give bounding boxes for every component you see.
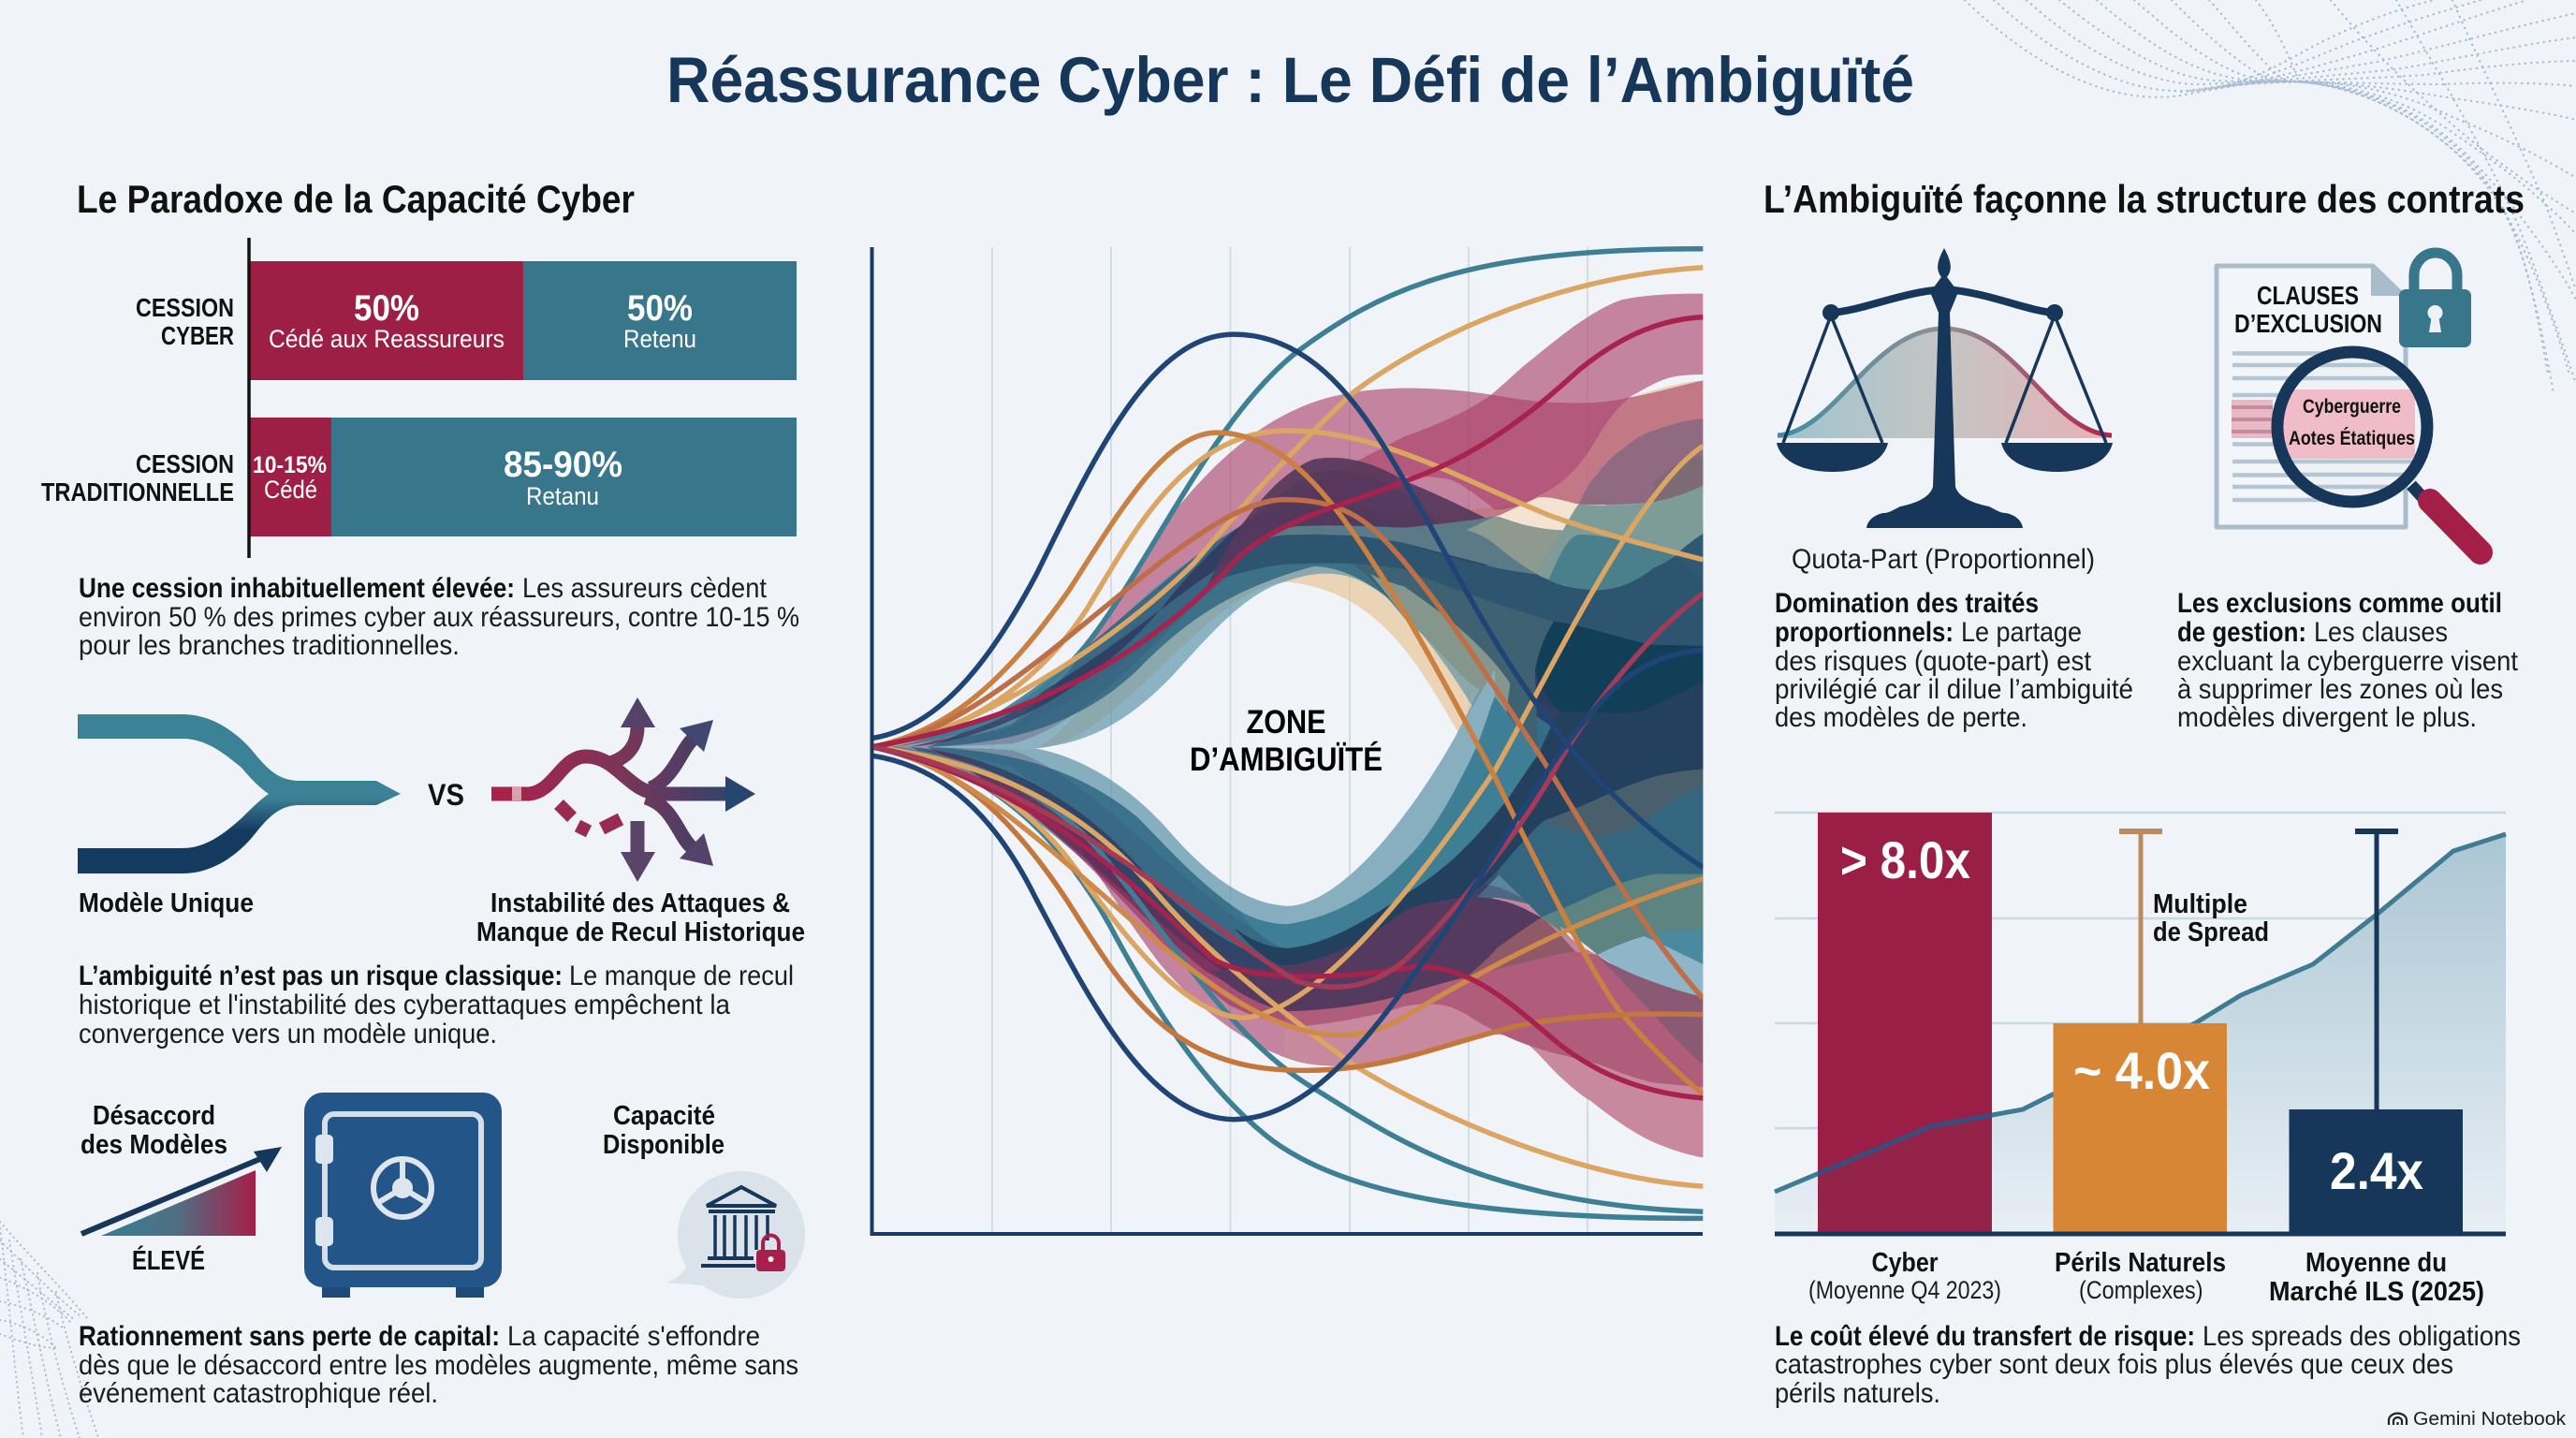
label: zone d'ambiguïté: D’AMBIGUÏTÉ — [1190, 741, 1383, 778]
title: Réassurance Cyber : Le Défi de l’Ambiguïté — [666, 44, 1914, 116]
label: zone d'ambiguïté — [1190, 704, 1383, 778]
axis labels: Périls Naturels — [2055, 1248, 2226, 1278]
text block: cession élevée: pour les branches traditionnelles. — [79, 630, 460, 661]
axis labels — [1808, 1248, 2484, 1307]
stacked bar chart: cession: 50% — [354, 288, 419, 329]
footer: gemini notebook mark: Gemini Notebook — [2413, 1409, 2567, 1430]
stacked bar chart: cession: Cédé aux Reassureurs — [269, 325, 505, 353]
label: instabilité des attaques — [476, 888, 805, 947]
stacked bar chart: cession: 85-90% — [504, 445, 622, 485]
icon: safe — [304, 1093, 502, 1298]
text block: ambiguïté — [79, 961, 794, 1049]
axis labels: Cyber — [1872, 1248, 1938, 1278]
text block: rationnement: événement catastrophique réel. — [79, 1378, 438, 1409]
label: multiple de spread — [2153, 889, 2269, 947]
text block: ambiguïté: L’ambiguité n’est pas un risque classique: — [79, 961, 563, 991]
text block: cession élevée — [79, 573, 799, 661]
text block: cession élevée: environ 50 % des primes cyber aux réassureurs, contre 10-15 % — [79, 602, 799, 633]
label: désaccord des modèles — [80, 1101, 227, 1160]
stacked bar chart: cession: Cédé — [264, 476, 317, 504]
axis labels: (Moyenne Q4 2023) — [1808, 1276, 2001, 1304]
label: capacité disponible: Capacité — [613, 1101, 715, 1131]
text block: exclusions — [2177, 588, 2519, 733]
stacked bar chart: cession: CESSION — [136, 293, 234, 322]
bar: cyber: > 8.0x — [1840, 830, 1970, 889]
icon: rising ramp arrow — [81, 1147, 282, 1236]
label: capacité disponible: Disponible — [603, 1130, 724, 1160]
icon: balance scale with bell curve — [1777, 248, 2113, 528]
text block: exclusions: excluant la cyberguerre visent — [2177, 646, 2519, 677]
icon: exclusion clauses document with magnifier and lock — [2217, 253, 2481, 552]
label: instabilité des attaques: Manque de Recul Historique — [476, 917, 805, 947]
panel: structure des contrats — [1764, 177, 2525, 1409]
bar: moyenne ILS: 2.4x — [2330, 1141, 2423, 1200]
stacked bar chart: cession: CESSION — [136, 449, 234, 478]
text block: rationnement: La capacité s'effondre — [507, 1321, 760, 1352]
text block: traités proportionnels — [1775, 588, 2133, 733]
label: instabilité des attaques: Instabilité des Attaques & — [490, 888, 790, 918]
bar: périls naturels — [2054, 831, 2227, 1232]
text block: ambiguïté: historique et l'instabilité des cyberattaques empêchent la — [79, 990, 730, 1020]
icon: exclusion clauses document with magnifier and lock: D’EXCLUSION — [2234, 309, 2382, 338]
text block: rationnement: dès que le désaccord entre les modèles augmente, même sans — [79, 1350, 798, 1381]
text block: traités proportionnels: Domination des traités — [1775, 588, 2039, 619]
label: élevé: ÉLEVÉ — [132, 1244, 205, 1276]
text block: traités proportionnels: Le partage — [1961, 617, 2082, 648]
stacked bar chart: cession: 50% — [627, 288, 693, 329]
heading: paradoxe: Le Paradoxe de la Capacité Cyber — [77, 177, 635, 221]
text block: traités proportionnels: des modèles de perte. — [1775, 702, 2027, 733]
label: capacité disponible — [603, 1101, 724, 1160]
text block: cession élevée: Une cession inhabituellement élevée: — [79, 573, 515, 604]
label: multiple de spread: de Spread — [2153, 917, 2269, 947]
text block: coût du transfert: Les spreads des obligations — [2203, 1321, 2521, 1352]
text block: traités proportionnels: proportionnels: — [1775, 617, 1954, 648]
text block: exclusions: Les clauses — [2314, 617, 2448, 648]
trend area — [1775, 834, 2506, 1234]
label: zone d'ambiguïté: ZONE — [1247, 704, 1325, 741]
text block: coût du transfert: périls naturels. — [1775, 1378, 1940, 1409]
label: modèle unique: Modèle Unique — [79, 888, 254, 918]
axis labels: Moyenne du — [2305, 1248, 2447, 1278]
text block: cession élevée: Les assureurs cèdent — [522, 573, 768, 604]
text block: exclusions: modèles divergent le plus. — [2177, 702, 2477, 733]
axis labels: (Complexes) — [2079, 1276, 2203, 1304]
projection curves — [872, 249, 1703, 1218]
label: désaccord des modèles: Désaccord — [93, 1101, 215, 1131]
icon: exclusion clauses document with magnifier and lock: Aotes Étatiques — [2289, 428, 2415, 449]
panel: paradoxe de la capacité — [41, 177, 799, 661]
panel: modèle unique vs instabilité — [78, 697, 805, 1049]
label: vs: VS — [428, 778, 464, 812]
axis labels: Marché ILS (2025) — [2269, 1277, 2484, 1307]
fan bands — [872, 249, 1703, 1218]
icon: bank with lock bubble — [666, 1171, 805, 1299]
stacked bar chart: cession: Retanu — [526, 482, 599, 510]
bar: périls naturels: ~ 4.0x — [2073, 1041, 2210, 1100]
painted flat regions on the right — [1206, 418, 1703, 1157]
icon: exclusion clauses document with magnifier and lock: CLAUSES — [2257, 281, 2359, 310]
bar: moyenne ILS — [2290, 831, 2463, 1232]
text block: exclusions: à supprimer les zones où les — [2177, 674, 2503, 705]
text block: exclusions: Les exclusions comme outil — [2177, 588, 2502, 619]
text block: traités proportionnels: privilégié car il dilue l’ambiguité — [1775, 674, 2133, 705]
text block: traités proportionnels: des risques (quote-part) est — [1775, 646, 2092, 677]
label: désaccord des modèles: des Modèles — [80, 1130, 227, 1160]
stacked bar chart: cession: Retenu — [623, 325, 696, 353]
text block: rationnement: Rationnement sans perte de capital: — [79, 1321, 500, 1352]
stacked bar chart: cession: TRADITIONNELLE — [41, 477, 234, 506]
stacked bar chart: cession: CYBER — [161, 321, 234, 350]
text block: rationnement — [79, 1321, 798, 1409]
text block: coût du transfert: catastrophes cyber sont deux fois plus élevés que ceux des — [1775, 1349, 2453, 1380]
text block: ambiguïté: Le manque de recul — [569, 961, 794, 991]
icon: exclusion clauses document with magnifier and lock: Cyberguerre — [2303, 396, 2401, 418]
text block: coût du transfert: Le coût élevé du transfert de risque: — [1775, 1321, 2195, 1352]
axes — [872, 247, 1703, 1234]
label: multiple de spread: Multiple — [2153, 889, 2247, 919]
icon: diverging arrows — [491, 697, 755, 882]
panel: rationnement — [79, 1093, 805, 1409]
icon: converging model arrow — [78, 714, 401, 873]
text block: ambiguïté: convergence vers un modèle unique. — [79, 1019, 497, 1049]
chart: zone d'ambiguïté fan chart — [872, 247, 1703, 1234]
text block: coût du transfert — [1775, 1321, 2521, 1409]
stacked bar chart: cession: 10-15% — [253, 452, 327, 478]
text block: exclusions: de gestion: — [2177, 617, 2306, 648]
label: quota-part: Quota-Part (Proportionnel) — [1792, 544, 2095, 575]
stacked bar chart: cession — [41, 238, 797, 558]
bar chart: multiple de spread — [1775, 813, 2506, 1307]
bar: cyber — [1818, 813, 1992, 1232]
